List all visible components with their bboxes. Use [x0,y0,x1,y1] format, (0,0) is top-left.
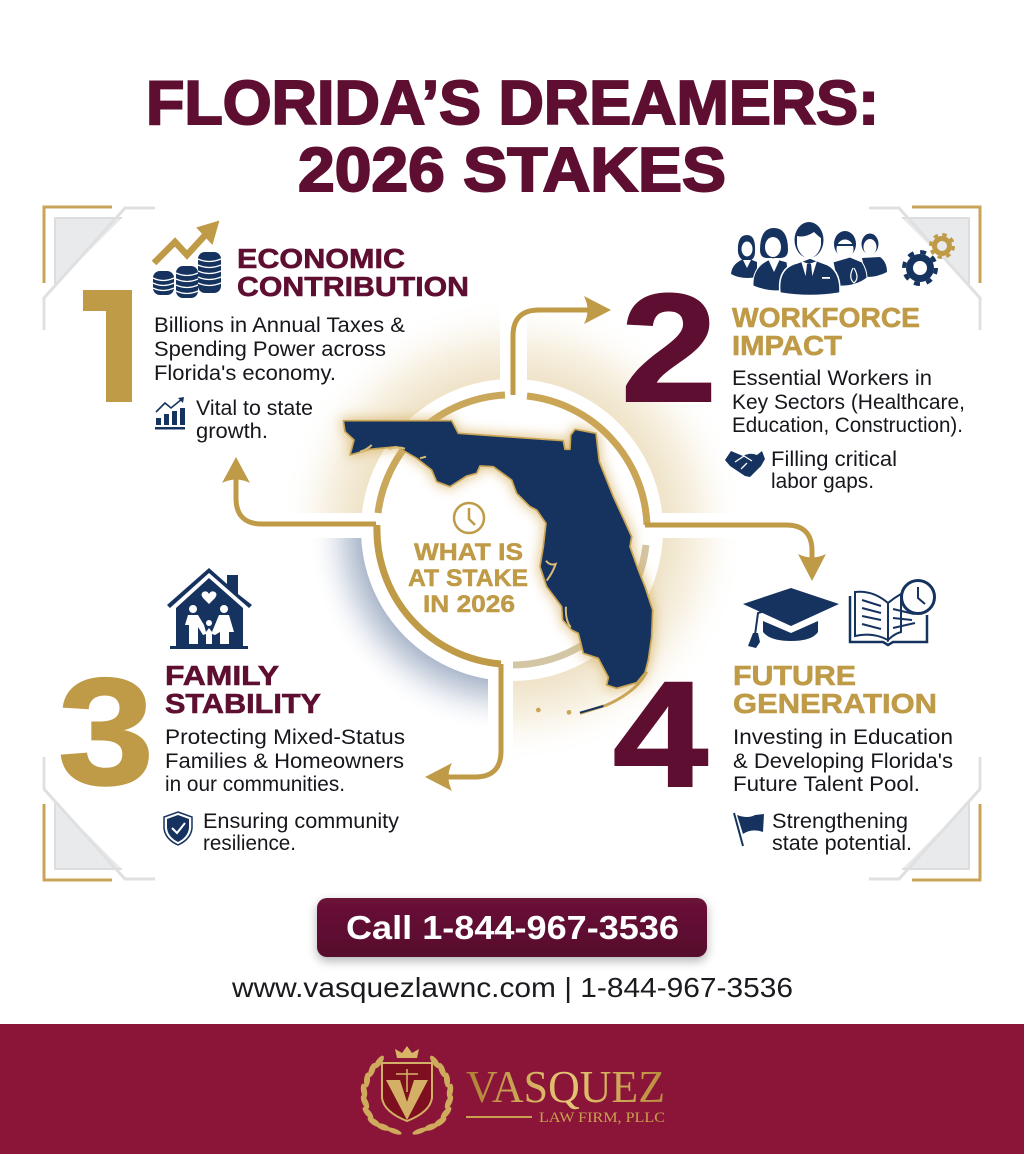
body text: Protecting Mixed-Status [165,726,405,749]
title: FLORIDA’S DREAMERS: [146,69,879,138]
person: far right [862,234,887,277]
call button: Call 1-844-967-3536 [346,909,679,946]
body text: in our communities. [165,773,345,796]
gold ring [377,395,647,665]
body text: Essential Workers in [732,367,932,390]
icon: graduation cap [743,588,839,648]
heading [732,302,920,361]
number 1: 1 [83,272,158,462]
body text [732,367,965,437]
heading: STABILITY [165,688,321,719]
corner bracket: bottom right [869,757,980,880]
number 2: 2 [621,262,717,434]
note: Vital to state [196,397,313,420]
center label [408,503,528,618]
note: Strengthening [772,810,908,833]
icon: gears [904,234,954,284]
wordmark: VASQUEZ [466,1062,665,1112]
contact line: www.vasquezlawnc.com | 1-844-967-3536 [231,972,793,1003]
icon: flag [734,813,764,846]
body text [733,726,953,796]
number 4: 4 [613,650,708,818]
footer band [0,1024,1024,1154]
central glow backdrop [270,290,760,770]
body text: Investing in Education [733,726,953,749]
title [146,69,879,205]
note: Ensuring community [203,810,400,833]
icon: clock [454,503,484,533]
body text [154,314,405,385]
heading: IMPACT [732,330,842,361]
note [772,810,912,855]
body text: Billions in Annual Taxes & [154,314,405,337]
body text: Education, Construction). [732,414,963,437]
section 2: workforce impact [621,222,965,493]
note [203,810,400,855]
person: woman far left [731,235,757,278]
heading [237,243,469,302]
note: growth. [196,420,268,443]
arrow to section 4 [645,525,826,581]
body text: Families & Homeowners [165,750,404,773]
center label: IN 2026 [423,591,515,618]
title: 2026 STAKES [298,136,726,205]
icon: shield [164,812,192,845]
number 3: 3 [58,647,154,817]
note [196,397,313,443]
center label: WHAT IS [414,539,523,566]
body text: & Developing Florida's [733,750,953,773]
heading [733,660,937,719]
section 1: economic contribution [83,222,469,462]
heading: CONTRIBUTION [237,271,469,302]
icon: workers [731,222,887,296]
icon: open book with clock [850,580,934,645]
note: state potential. [772,832,912,855]
map of Florida [343,421,653,715]
heading: FAMILY [165,660,279,691]
note: resilience. [203,832,296,855]
note: labor gaps. [771,470,874,493]
logo: LAW FIRM, PLLC [539,1110,665,1126]
body text: Spending Power across [154,338,386,361]
icon: shield [382,1063,432,1121]
icon: handshake [725,451,765,477]
corner bracket: top right [869,207,980,330]
call button [317,898,707,957]
logo [359,1046,665,1136]
note: Filling critical [771,448,897,471]
heading [165,660,321,719]
arrow to section 2 [513,296,611,395]
corner bracket: bottom left [44,757,155,880]
number 1 [83,290,132,402]
person: man with glasses [833,231,867,286]
corner bracket: top left [44,207,155,330]
icon: crown [395,1046,419,1058]
heading: WORKFORCE [732,302,920,333]
icon: bar chart [155,397,185,430]
body text [165,726,405,796]
heading: GENERATION [733,688,937,719]
arrow to section 1 [222,457,376,524]
body text: Future Talent Pool. [733,773,920,796]
icon: laurel wreath [359,1054,455,1136]
heading: FUTURE [733,660,856,691]
body text: Florida's economy. [154,362,336,385]
body text: Key Sectors (Healthcare, [732,391,965,414]
note [771,448,897,493]
center label: AT STAKE [408,565,528,592]
arrow to section 3 [425,664,501,791]
section 3: family stability [58,568,405,855]
icon: family house [167,568,252,649]
section 4: future generation [613,580,953,855]
heading: ECONOMIC [237,243,405,274]
icon: coins and rising arrow [153,222,221,298]
person: woman [753,228,790,291]
person: man in centre [780,222,840,296]
